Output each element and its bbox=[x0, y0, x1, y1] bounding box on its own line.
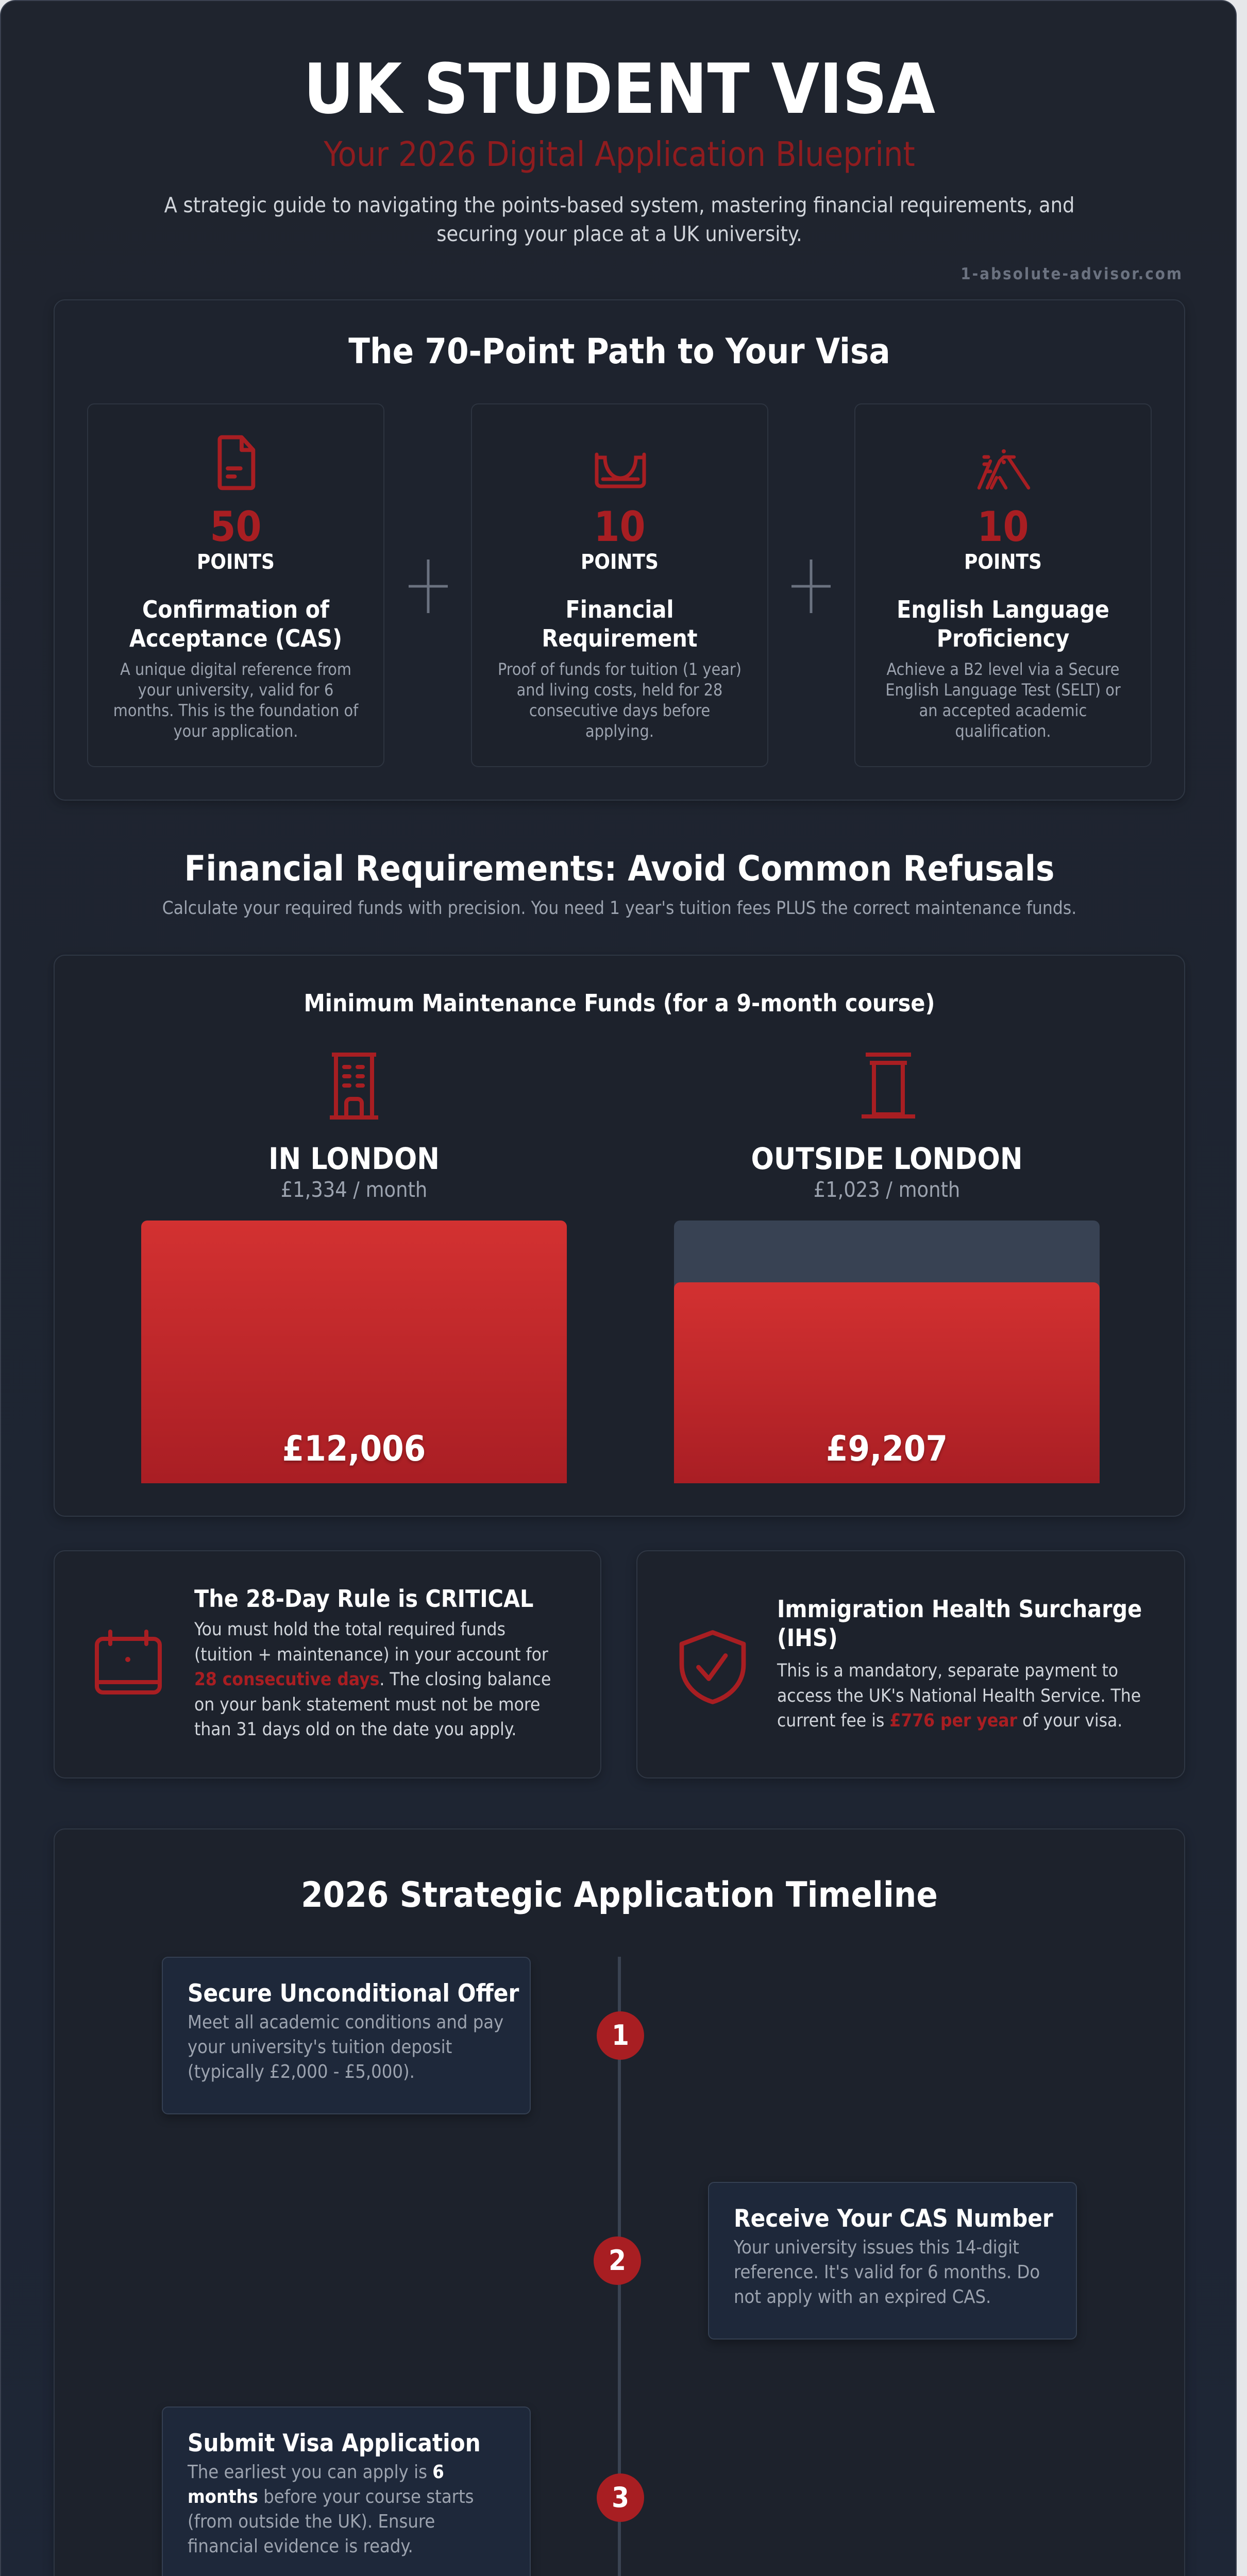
panel: 70-point path bbox=[54, 299, 1185, 801]
card: financial: Proof of funds for tuition (1 year) bbox=[498, 659, 742, 679]
card: english: English Language Test (SELT) or bbox=[885, 680, 1121, 700]
london column: £1,334 / month bbox=[281, 1177, 427, 1202]
callout: IHS: access the UK's National Health Service. The bbox=[777, 1686, 1141, 1706]
callout: 28-day rule: 28 consecutive days. The closing balance bbox=[194, 1669, 551, 1690]
card: CAS: A unique digital reference from bbox=[120, 659, 351, 679]
heading: 2026 Strategic Application Timeline bbox=[301, 1875, 938, 1916]
step 3: (from outside the UK). Ensure bbox=[188, 2511, 435, 2532]
step 3 bbox=[162, 2406, 531, 2576]
card: CAS: POINTS bbox=[197, 550, 275, 574]
heading: financial requirements: Financial Requirements: Avoid Common Refusals bbox=[184, 849, 1054, 889]
card: CAS bbox=[87, 403, 384, 767]
icon: calendar bbox=[95, 1630, 162, 1694]
outside london column: £1,023 / month bbox=[814, 1177, 960, 1202]
icon: wallet bbox=[595, 452, 646, 488]
marker 1: 1 bbox=[612, 2019, 629, 2052]
card: CAS: your university, valid for 6 bbox=[138, 680, 333, 700]
callout: 28-day rule: You must hold the total required funds bbox=[194, 1619, 505, 1640]
step 1: Secure Unconditional Offer bbox=[188, 1979, 519, 2008]
step 3: financial evidence is ready. bbox=[188, 2536, 413, 2557]
card: CAS: Acceptance (CAS) bbox=[129, 624, 342, 652]
card: english: Achieve a B2 level via a Secure bbox=[887, 659, 1119, 679]
subtitle: Your 2026 Digital Application Blueprint bbox=[324, 134, 915, 174]
timeline line bbox=[618, 1957, 621, 2576]
callout: 28-day rule bbox=[54, 1550, 601, 1778]
callout: 28-day rule: The 28-Day Rule is CRITICAL bbox=[194, 1585, 533, 1613]
bar: outside london: £9,207 bbox=[826, 1429, 948, 1469]
card: CAS: Confirmation of bbox=[142, 596, 329, 623]
marker 1 bbox=[597, 2011, 644, 2060]
card: CAS: months. This is the foundation of bbox=[113, 701, 358, 720]
step 2: Receive Your CAS Number bbox=[734, 2205, 1053, 2233]
marker 2 bbox=[594, 2236, 641, 2285]
icon: shield bbox=[679, 1630, 746, 1704]
panel: maintenance funds bbox=[54, 955, 1185, 1517]
step 3: months before your course starts bbox=[188, 2486, 474, 2507]
step 1: your university's tuition deposit bbox=[188, 2037, 452, 2058]
step 2: not apply with an expired CAS. bbox=[734, 2286, 991, 2308]
step 1: Meet all academic conditions and pay bbox=[188, 2012, 503, 2033]
panel: timeline bbox=[54, 1828, 1185, 2576]
intro text: securing your place at a UK university. bbox=[436, 222, 802, 246]
bar: london: £12,006 bbox=[282, 1429, 426, 1469]
card: financial: and living costs, held for 28 bbox=[517, 680, 722, 700]
card: english: an accepted academic bbox=[919, 701, 1087, 720]
card: financial: 10 bbox=[594, 503, 646, 551]
card: english: English Language bbox=[897, 596, 1109, 623]
callout: 28-day rule: on your bank statement must not be more bbox=[194, 1694, 540, 1715]
icon: pillar bbox=[862, 1053, 915, 1118]
callout: IHS: current fee is £776 per year of your visa. bbox=[777, 1710, 1122, 1731]
icon: language bbox=[977, 449, 1031, 489]
bar: london bbox=[141, 1221, 567, 1483]
marker 3: 3 bbox=[612, 2481, 629, 2514]
card: english: qualification. bbox=[955, 721, 1051, 741]
card: CAS: 50 bbox=[210, 503, 262, 551]
card: CAS: your application. bbox=[174, 721, 298, 741]
card: financial: consecutive days before bbox=[529, 701, 710, 720]
card: english: Proficiency bbox=[937, 624, 1069, 652]
intro text bbox=[164, 193, 1074, 246]
marker 3 bbox=[597, 2473, 644, 2522]
panel heading: Minimum Maintenance Funds (for a 9-month course) bbox=[304, 989, 935, 1017]
outside london column bbox=[674, 1053, 1100, 1483]
heading: The 70-Point Path to Your Visa bbox=[348, 331, 890, 372]
marker 2: 2 bbox=[609, 2244, 626, 2277]
step 3: Submit Visa Application bbox=[188, 2429, 481, 2458]
callout: IHS: This is a mandatory, separate payment to bbox=[777, 1660, 1118, 1681]
callout: IHS: (IHS) bbox=[777, 1624, 838, 1652]
plus 2 bbox=[791, 560, 831, 613]
step 3: The earliest you can apply is 6 bbox=[188, 2462, 444, 2483]
card: english: 10 bbox=[977, 503, 1029, 551]
step 1: (typically £2,000 - £5,000). bbox=[188, 2061, 415, 2082]
subheading: Calculate your required funds with precision. You need 1 year's tuition fees PLUS the correct maintenance funds. bbox=[162, 898, 1076, 919]
intro text: A strategic guide to navigating the points-based system, mastering financial requirements, and bbox=[164, 193, 1074, 217]
callout: IHS: Immigration Health Surcharge bbox=[777, 1595, 1142, 1623]
title: UK STUDENT VISA bbox=[304, 49, 935, 129]
london column bbox=[141, 1053, 567, 1483]
card: financial: applying. bbox=[585, 721, 654, 741]
icon: document bbox=[217, 435, 256, 490]
card: english: POINTS bbox=[964, 550, 1042, 574]
step 2: reference. It's valid for 6 months. Do bbox=[734, 2262, 1040, 2283]
step 2: Your university issues this 14-digit bbox=[734, 2237, 1019, 2258]
outside london column: OUTSIDE LONDON bbox=[751, 1141, 1022, 1176]
callout: IHS bbox=[636, 1550, 1185, 1778]
plus 1 bbox=[409, 560, 448, 613]
card: financial: Financial bbox=[565, 596, 674, 623]
card: english bbox=[854, 403, 1152, 767]
callout: 28-day rule: (tuition + maintenance) in your account for bbox=[194, 1645, 548, 1665]
bar: outside london bbox=[674, 1221, 1100, 1483]
site tag: 1-absolute-advisor.com bbox=[960, 265, 1183, 283]
callout: 28-day rule: than 31 days old on the date you apply. bbox=[194, 1719, 516, 1740]
card: financial: POINTS bbox=[581, 550, 659, 574]
london column: IN LONDON bbox=[268, 1141, 440, 1176]
step 2 bbox=[708, 2182, 1077, 2340]
card: financial: Requirement bbox=[542, 624, 698, 652]
icon: building bbox=[330, 1053, 378, 1120]
card: financial bbox=[471, 403, 768, 767]
step 1 bbox=[162, 1957, 531, 2114]
